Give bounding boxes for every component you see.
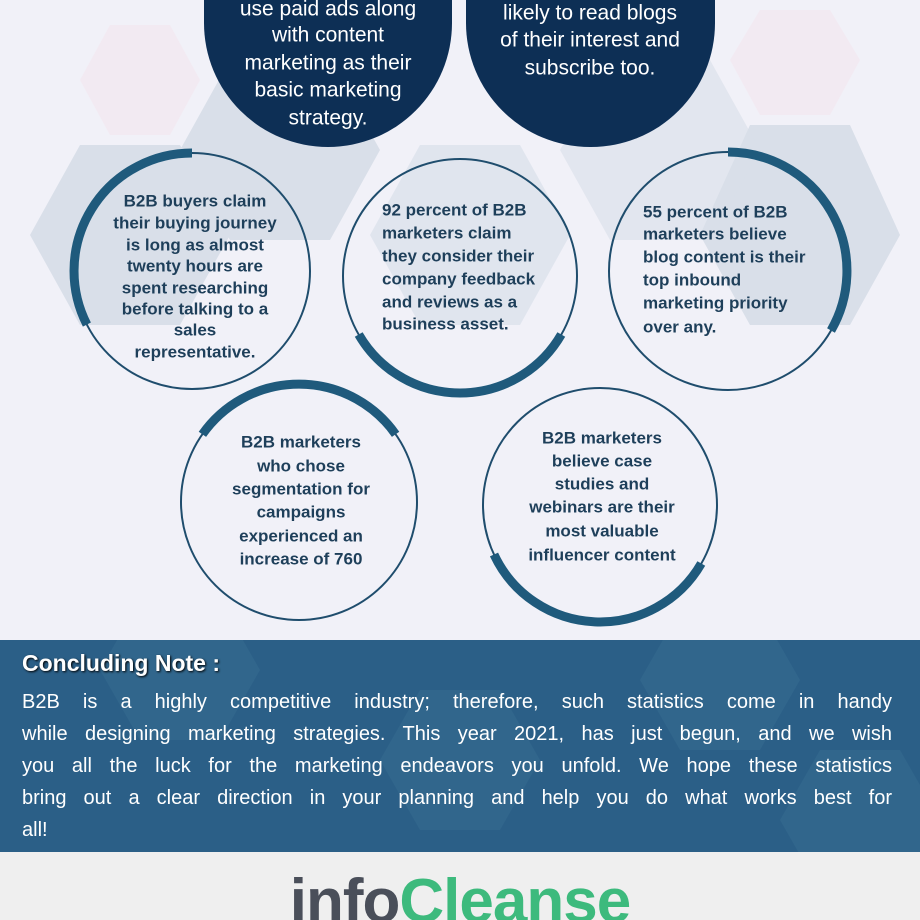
pill right: of their interest and [500,28,680,52]
circle 3: marketers believe [643,224,787,244]
pill right [466,0,715,147]
background hexagons [30,60,900,325]
circle 3: 55 percent of B2B [643,202,788,222]
circle 2: marketers claim [382,224,511,242]
circle 2: company feedback [382,270,536,288]
circle 3: blog content is their [643,248,806,266]
circle 1: B2B buyers claim [124,192,266,210]
circle 4: B2B marketers [241,432,361,452]
circle 4: experienced an [239,526,363,546]
body text: B2B is a highly competitive industry; therefore, such statistics come in handy [22,691,892,713]
circle 2: and reviews as a [382,292,518,312]
pill left: with content [271,24,384,46]
circle 1: twenty hours are [127,256,263,276]
circle 1: their buying journey [113,214,277,232]
circle 1 [74,153,310,389]
circle 2 [343,159,577,393]
circle 5: most valuable [545,522,659,540]
body text: all! [22,819,48,841]
pill left: marketing as their [245,52,411,74]
circle 4 [181,384,417,620]
circle 2: they consider their [382,246,534,266]
circle 4: segmentation for [232,480,370,498]
circle 5: studies and [555,474,649,494]
body text: bring out a clear direction in your planning and help you do what works best for [22,787,892,809]
circle 5: B2B marketers [542,428,662,448]
pill right: likely to read blogs [503,2,677,24]
body text: you all the luck for the marketing endeavors you unfold. We hope these statistics [22,755,892,777]
pill left: basic marketing [254,78,402,102]
circle 1: spent researching [122,278,268,298]
circle 1: before talking to a [122,300,269,318]
circle 2: 92 percent of B2B [382,200,527,220]
circle 2: business asset. [382,314,509,334]
pill left [204,0,452,147]
circle 4: increase of 760 [240,550,362,568]
concluding note panel [0,640,920,852]
body text [22,691,892,841]
circle 4: campaigns [257,502,345,522]
circle 1: representative. [135,342,255,362]
circle 3: top inbound [643,270,741,290]
pill right: subscribe too. [525,56,655,80]
circle 3: marketing priority [643,294,788,312]
circle 4: who chose [256,456,345,476]
circle 5: believe case [552,452,652,470]
body text: while designing marketing strategies. This year 2021, has just begun, and we wish [22,723,892,745]
circle 5: webinars are their [528,498,675,516]
pill left: strategy. [289,106,367,130]
circle 5: influencer content [528,546,676,564]
heading: Concluding Note : [22,650,220,676]
circle 3 [609,152,847,390]
circle 1: sales [174,320,216,340]
circle 1: is long as almost [126,236,264,254]
circle 3: over any. [643,318,716,336]
footer logo [0,852,920,920]
circle 5 [483,388,717,622]
